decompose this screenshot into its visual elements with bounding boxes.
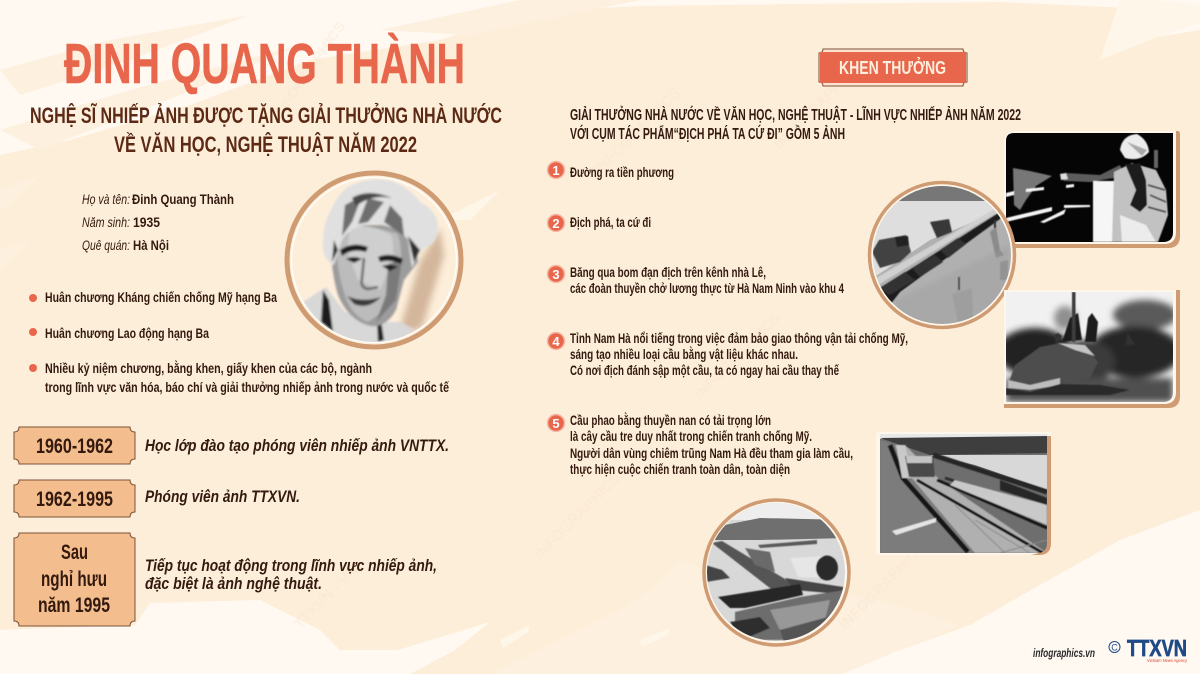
logo: TTXVN: C: [1111, 642, 1118, 652]
item 4: Tỉnh Nam Hà nổi tiếng trong việc đảm bảo giao thông vận tải chống Mỹ,: [570, 331, 908, 346]
text: INFOGRAPHICS: [836, 539, 929, 633]
personal details: Hà Nội: [133, 237, 169, 253]
photo 3: people on boat amid smoke: [997, 290, 1181, 408]
item 4: Có nơi địch đánh sập một cầu, ta có ngay hai cầu thay thế: [570, 363, 839, 378]
text: INFOGRAPHICS: [531, 469, 624, 563]
personal details: Năm sinh:: [82, 214, 130, 230]
personal details: [82, 191, 234, 253]
timeline: after retirement 1995: nghỉ hưu: [41, 568, 107, 591]
item 3: các đoàn thuyền chở lương thực từ Hà Nam Ninh vào khu 4: [570, 281, 844, 296]
timeline: 1960-1962: [14, 427, 449, 464]
item 1: Đường ra tiền phương: [570, 165, 674, 180]
personal details: 1935: [133, 214, 160, 230]
timeline: 1962-1995: [14, 480, 300, 517]
title: ĐINH QUANG THÀNH: [64, 32, 465, 96]
logo: TTXVN: Vietnam News Agency: [1147, 658, 1188, 663]
item 3: Băng qua bom đạn địch trên kênh nhà Lê,: [570, 265, 766, 280]
timeline: after retirement 1995: [14, 533, 437, 626]
footer credit: infographics.vn: [1033, 648, 1095, 660]
item 3: [548, 265, 844, 296]
honours list: Huân chương Lao động hạng Ba: [45, 325, 209, 341]
item 5: [548, 413, 853, 477]
item 2: [548, 214, 651, 232]
item 5: thực hiện cuộc chiến tranh toàn dân, toàn diện: [570, 462, 790, 477]
personal details: Quê quán:: [82, 237, 130, 253]
timeline: 1962-1995: 1962-1995: [36, 488, 113, 511]
timeline: after retirement 1995: đặc biệt là ảnh nghệ thuật.: [145, 574, 322, 593]
personal details: Đinh Quang Thành: [132, 191, 234, 207]
photo 2: trucks on pontoon bridge: [870, 182, 1015, 330]
timeline: 1962-1995: Phóng viên ảnh TTXVN.: [145, 487, 300, 506]
item 4: sáng tạo nhiều loại cầu bằng vật liệu khác nhau.: [570, 347, 798, 362]
portrait photo: [287, 173, 461, 347]
item 3: 3: [552, 267, 560, 282]
item 5: là cây cầu tre duy nhất trong chiến tranh chống Mỹ.: [570, 429, 812, 444]
photo 5: bridge with cylindrical cargo: [704, 500, 850, 645]
section badge: khen thưởng: KHEN THƯỞNG: [839, 57, 946, 78]
item 5: 5: [552, 416, 560, 431]
item 4: [548, 331, 908, 378]
section badge: khen thưởng: [819, 49, 967, 86]
text: INFOGRAPHICS: [771, 59, 864, 153]
personal details: Họ và tên:: [82, 191, 130, 207]
award heading: [570, 104, 1021, 143]
subtitle: [30, 103, 502, 157]
item 5: Người dân vùng chiêm trũng Nam Hà đều tham gia làm cầu,: [570, 446, 853, 461]
photo 4: long plank bridge with truck: [876, 432, 1051, 555]
honours list: trong lĩnh vực văn hóa, báo chí và giải thưởng nhiếp ảnh trong nước và quốc tế: [45, 379, 449, 395]
logo: TTXVN: [1109, 635, 1188, 663]
honours list: Nhiều kỷ niệm chương, bằng khen, giấy khen của các bộ, ngành: [45, 359, 372, 376]
item 5: Cầu phao bằng thuyền nan có tải trọng lớn: [570, 413, 771, 428]
timeline: after retirement 1995: năm 1995: [38, 594, 110, 617]
text: INFOGRAPHICS: [591, 84, 684, 178]
item 2: 2: [552, 216, 560, 231]
subtitle: NGHỆ SĨ NHIẾP ẢNH ĐƯỢC TẶNG GIẢI THƯỞNG NHÀ NƯỚC: [30, 103, 502, 128]
timeline: 1960-1962: Học lớp đào tạo phóng viên nhiếp ảnh VNTTX.: [145, 436, 449, 455]
text: INFOGRAPHICS: [691, 309, 784, 403]
subtitle: VỀ VĂN HỌC, NGHỆ THUẬT NĂM 2022: [114, 132, 417, 157]
honours list: Huân chương Kháng chiến chống Mỹ hạng Ba: [45, 289, 277, 305]
timeline: after retirement 1995: Tiếp tục hoạt động trong lĩnh vực nhiếp ảnh,: [145, 556, 437, 575]
text: TTXVN - VNA: [291, 554, 370, 633]
honours list: [29, 289, 449, 395]
item 2: Địch phá, ta cứ đi: [570, 215, 651, 230]
text: INFOGRAPHICS: [269, 18, 349, 122]
item 1: 1: [552, 163, 560, 178]
award heading: VỚI CỤM TÁC PHẨM“ĐỊCH PHÁ TA CỨ ĐI” GỒM 5 ẢNH: [570, 124, 845, 143]
item 4: 4: [552, 334, 560, 349]
photo 1: woman signalling with flag: [1004, 131, 1180, 248]
timeline: after retirement 1995: Sau: [61, 541, 88, 564]
item 1: [548, 162, 674, 180]
timeline: 1960-1962: 1960-1962: [36, 435, 113, 458]
